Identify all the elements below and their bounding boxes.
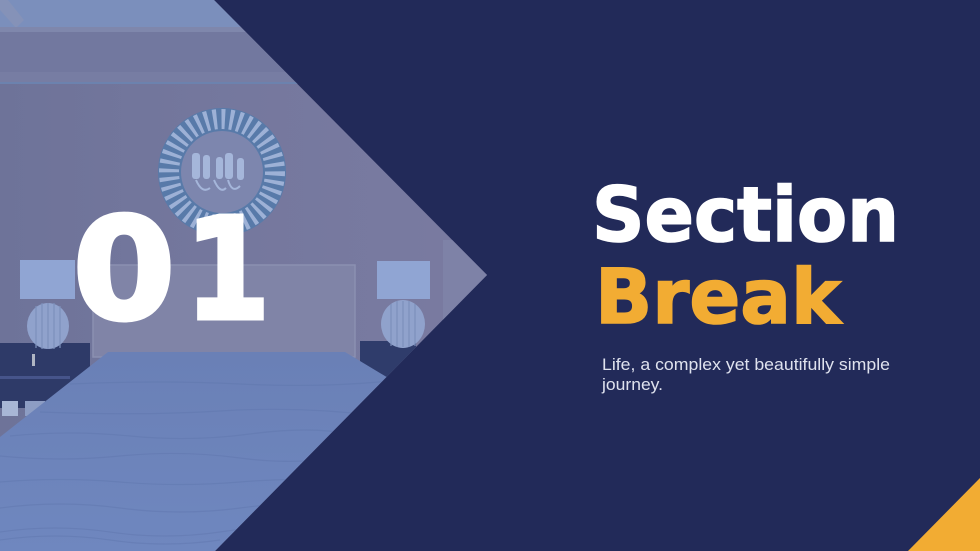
left bedside table and lamp [0,260,90,416]
subtitle text: Life, a complex yet beautifully simple [602,355,890,374]
section number: 0 [73,189,175,352]
section number: 1 [185,189,270,352]
headboard [93,265,355,357]
subtitle text [601,355,890,394]
photo panel: arrow-shaped bedroom image [0,0,493,551]
subtitle text: journey. [601,375,663,394]
title: Section: Section [592,170,899,259]
title: Break: Break [595,252,842,341]
section number [73,189,270,352]
corner accent triangle [908,478,980,551]
right bedside table and lamp [360,261,430,381]
wall mirror [158,108,286,236]
bed with quilted bedding [0,352,386,551]
